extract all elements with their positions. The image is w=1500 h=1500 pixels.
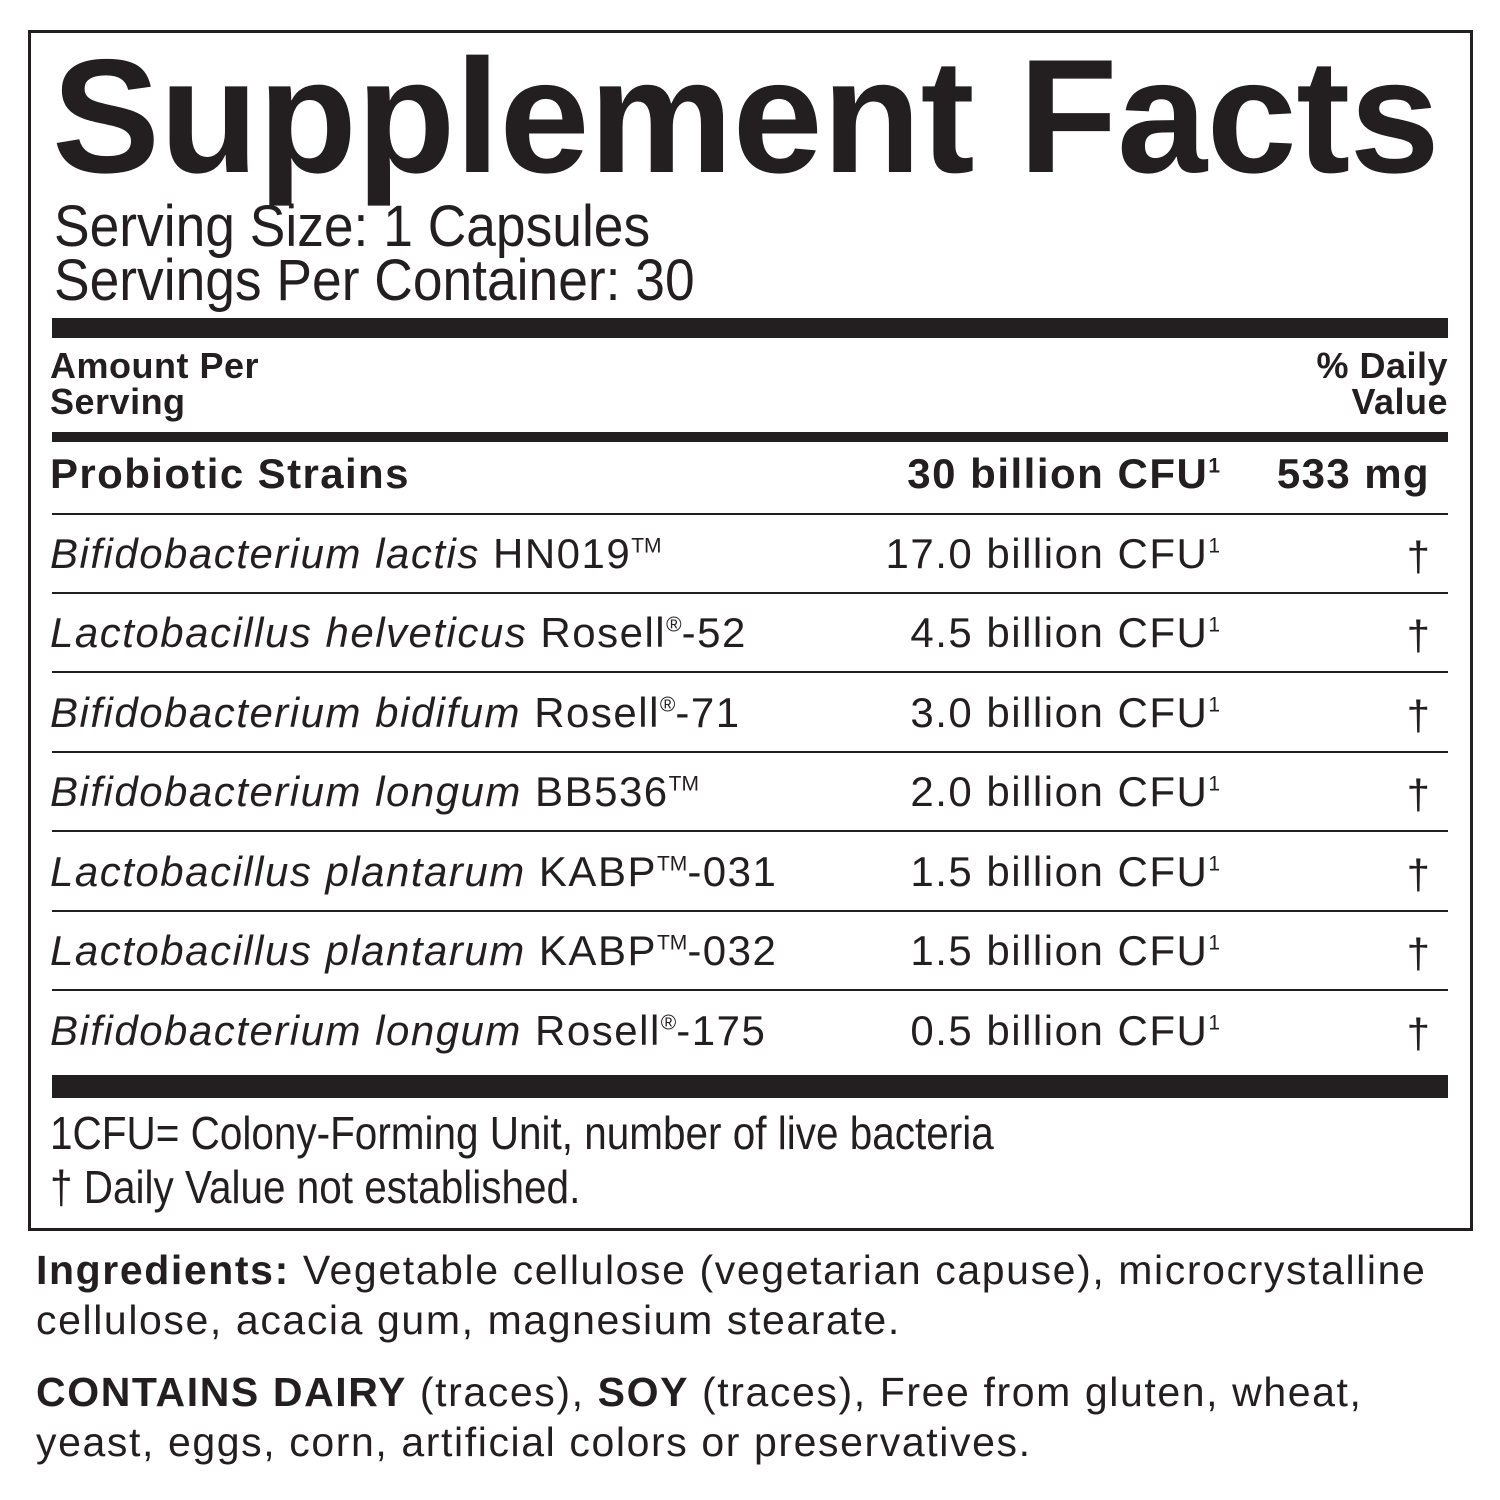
strain row 1: 17.0 billion CFU1: [886, 530, 1220, 577]
strain row 5: †: [1407, 851, 1430, 898]
strain row 5: 1.5 billion CFU1: [910, 848, 1220, 895]
probiotic strains total row: Probiotic Strains: [50, 450, 410, 497]
header: daily value: Value: [1351, 381, 1448, 422]
header: amount per serving: [50, 345, 259, 422]
thick bar: [52, 318, 1448, 338]
strain row 6: [50, 927, 1430, 977]
medium bar: [52, 432, 1448, 442]
header: amount per serving: Serving: [50, 381, 186, 422]
ingredients text: [36, 1247, 1426, 1343]
allergen text: yeast, eggs, corn, artificial colors or preservatives.: [36, 1419, 1032, 1465]
strain row 4: 2.0 billion CFU1: [910, 768, 1220, 815]
thick bar bottom: [52, 1075, 1448, 1098]
strain row 5: [50, 848, 1430, 898]
allergen text: [36, 1369, 1363, 1465]
strain row 2: 4.5 billion CFU1: [910, 609, 1220, 656]
strain row 7: 0.5 billion CFU1: [910, 1007, 1220, 1054]
strain row 3: Bifidobacterium bidifum Rosell®-71: [50, 689, 741, 736]
serving info: [54, 194, 695, 313]
header: daily value: [1316, 345, 1448, 422]
footnotes: 1CFU= Colony-Forming Unit, number of live bacteria: [50, 1107, 994, 1159]
strain row 6: †: [1407, 930, 1430, 977]
strain row 7: †: [1407, 1010, 1430, 1057]
strain row 2: †: [1407, 612, 1430, 659]
strain row 1: Bifidobacterium lactis HN019TM: [50, 530, 662, 577]
strain row 4: [50, 768, 1430, 818]
probiotic strains total row: 533 mg: [1277, 450, 1430, 497]
strain row 3: †: [1407, 692, 1430, 739]
strain row 4: Bifidobacterium longum BB536TM: [50, 768, 699, 815]
strain row 1: [50, 530, 1430, 580]
allergen text: CONTAINS DAIRY (traces), SOY (traces), Free from gluten, wheat,: [36, 1369, 1363, 1415]
strain row 1: †: [1407, 533, 1430, 580]
strain row 3: 3.0 billion CFU1: [910, 689, 1220, 736]
strain row 6: 1.5 billion CFU1: [910, 927, 1220, 974]
strain row 3: [50, 689, 1430, 739]
ingredients text: cellulose, acacia gum, magnesium stearate.: [36, 1297, 901, 1343]
strain row 6: Lactobacillus plantarum KABPTM-032: [50, 927, 777, 974]
panel: supplement facts box: [28, 30, 1473, 1231]
probiotic strains total row: [50, 450, 1430, 497]
footnotes: † Daily Value not established.: [50, 1161, 580, 1213]
title: Supplement Facts: [52, 26, 1439, 207]
strain row 4: †: [1407, 771, 1430, 818]
serving info: Serving Size: 1 Capsules: [54, 194, 650, 259]
strain row 7: Bifidobacterium longum Rosell®-175: [50, 1007, 766, 1054]
strain row 2: [50, 609, 1430, 659]
strain row 5: Lactobacillus plantarum KABPTM-031: [50, 848, 777, 895]
probiotic strains total row: 30 billion CFU1: [907, 450, 1220, 497]
footnotes: [50, 1107, 994, 1213]
strain row 2: Lactobacillus helveticus Rosell®-52: [50, 609, 747, 656]
header: amount per serving: Amount Per: [50, 345, 259, 386]
serving info: Servings Per Container: 30: [54, 248, 695, 313]
ingredients text: Ingredients: Vegetable cellulose (vegetarian capuse), microcrystalline: [36, 1247, 1426, 1293]
strain row 7: [50, 1007, 1430, 1057]
header: daily value: % Daily: [1316, 345, 1448, 386]
